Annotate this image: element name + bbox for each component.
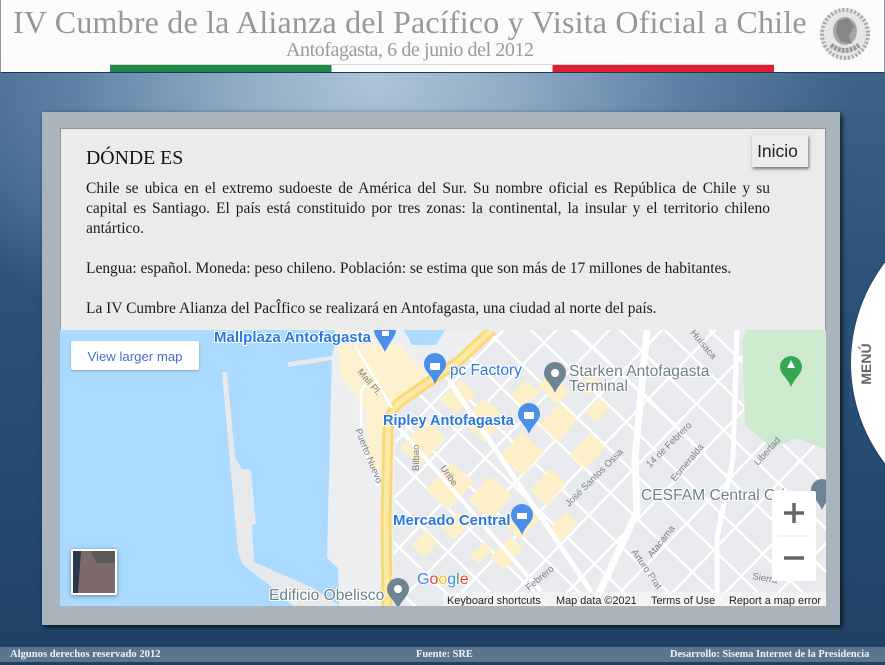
header banner	[0, 0, 885, 73]
poi labels grey	[269, 363, 785, 604]
highway	[386, 330, 492, 606]
water	[60, 330, 826, 606]
footer: source: Fuente: SRE	[416, 649, 473, 660]
street labels: Mall Pl.	[355, 367, 383, 398]
poi labels grey: Starken Antofagasta	[569, 363, 710, 380]
footer bar	[0, 647, 885, 662]
land	[327, 330, 826, 606]
text block: intro	[86, 180, 770, 237]
text block: intro: Chile se ubica en el extremo sudoeste de América del Sur. Su nombre oficial es República de Chile y su	[86, 180, 770, 197]
view larger map button	[71, 341, 199, 370]
poi labels grey: Edificio Obelisco	[269, 587, 385, 604]
heading: DÓNDE ES	[86, 147, 183, 169]
icon: national seal	[820, 8, 870, 60]
street labels: Arturo Prat	[629, 547, 664, 592]
poi pins	[374, 330, 833, 609]
panel: outer card	[42, 112, 840, 625]
button: inicio	[752, 135, 808, 167]
poi labels blue: pc Factory	[450, 362, 522, 379]
title: IV Cumbre de la Alianza del Pacífico y Visita Oficial a Chile	[13, 4, 807, 40]
street labels: Libertad	[752, 435, 783, 468]
flag stripe	[110, 64, 774, 72]
satellite thumbnail	[71, 549, 117, 595]
street labels: José Santos Ossa	[563, 446, 626, 509]
text block: facts: Lengua: español. Moneda: peso chileno. Población: se estima que son más de 17 millones de habitantes.	[86, 260, 731, 277]
view larger map button: View larger map	[87, 349, 183, 364]
pier	[288, 356, 332, 367]
map	[60, 330, 826, 606]
park	[742, 330, 826, 450]
menu tab	[851, 262, 885, 464]
text block: venue: La IV Cumbre Alianza del PacÎfico se realizará en Antofagasta, una ciudad al norte del país.	[86, 300, 657, 317]
street labels: Esmeralda	[669, 442, 707, 484]
menu label: MENÚ	[858, 343, 874, 385]
waterfront retail strip	[338, 345, 432, 470]
subtitle: Antofagasta, 6 de junio del 2012	[286, 39, 534, 61]
poi labels blue	[214, 329, 522, 529]
local streets	[355, 345, 392, 486]
street labels	[352, 328, 783, 593]
button: inicio: Inicio	[757, 141, 798, 161]
main avenues	[392, 330, 740, 606]
footer: rights: Algunos derechos reservado 2012	[10, 649, 161, 660]
street labels: Puerto Nuevo	[352, 427, 384, 485]
poi labels grey: Terminal	[569, 378, 628, 395]
poi labels blue: Mercado Central	[393, 512, 511, 529]
text block: intro: capital es Santiago. El país está constituido por tres zonas: la continental, la insular y el territorio chileno	[86, 200, 770, 217]
logo: Google	[417, 571, 469, 588]
commercial blocks	[400, 372, 610, 570]
panel: text area	[60, 128, 826, 331]
street labels: Uribe	[438, 463, 460, 488]
breakwater	[222, 372, 340, 606]
street labels: Atacama	[646, 523, 678, 560]
poi labels grey: CESFAM Central Ori	[641, 487, 785, 504]
attribution bar	[443, 592, 826, 607]
street grid	[390, 330, 826, 606]
street labels: Febrero	[524, 563, 556, 593]
street labels: Sierra	[751, 571, 779, 586]
poi labels blue: Ripley Antofagasta	[383, 413, 515, 429]
zoom controls	[772, 491, 816, 581]
text block: intro: antártico.	[86, 220, 144, 237]
street labels: Bilbao	[411, 445, 422, 471]
footer: credits: Desarrollo: Sisema Internet de la Presidencia	[670, 649, 869, 660]
street labels: 14 de Febrero	[644, 420, 694, 470]
